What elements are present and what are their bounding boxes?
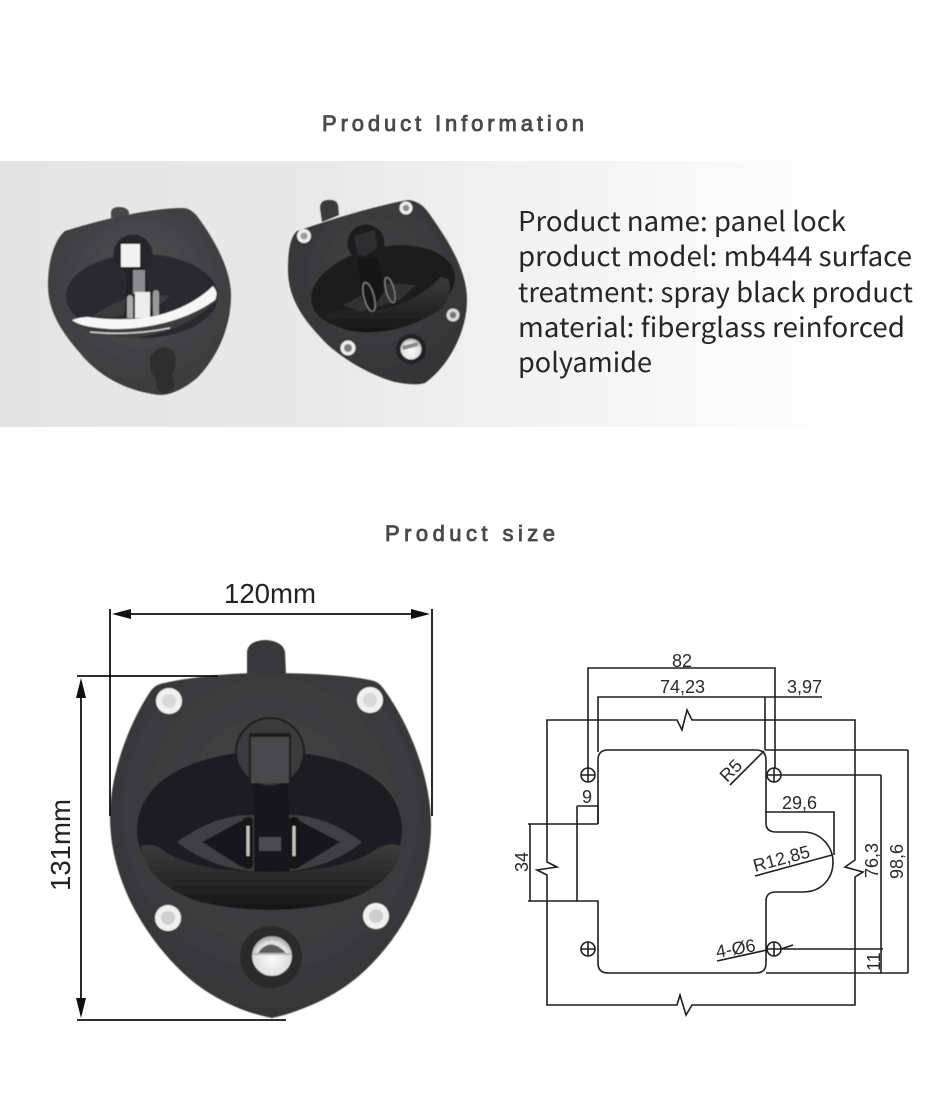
- dimension labels: 76,3: [862, 843, 882, 878]
- dimension lines: [530, 668, 908, 973]
- handle recess: [137, 753, 402, 907]
- product photo: dimensioned lock: [110, 640, 431, 1018]
- key cylinder: [396, 334, 426, 364]
- outer panel with break marks: [537, 710, 863, 1015]
- dimension: height 131mm: 131mm: [45, 799, 76, 891]
- text block: product description: treatment: spray black product: [518, 271, 913, 310]
- dimension labels: 9: [582, 787, 592, 807]
- hinge: [252, 780, 290, 875]
- dimension labels: [512, 651, 907, 971]
- dimension labels: 29,6: [782, 793, 817, 813]
- dimension labels: 4-Ø6: [714, 935, 757, 962]
- mounting holes: [581, 768, 781, 956]
- text block: product description: polyamide: [518, 341, 652, 380]
- R5 leader: [730, 751, 764, 785]
- dimension labels: R5: [716, 755, 746, 786]
- text block: product description: [518, 200, 913, 380]
- screw holes: [155, 687, 389, 931]
- grip handle: [141, 844, 400, 910]
- panel: product information band: [0, 161, 950, 427]
- key cylinder: [240, 926, 302, 988]
- text block: product description: material: fiberglass reinforced: [518, 306, 905, 345]
- dimension labels: 74,23: [660, 677, 705, 697]
- screw holes: [297, 202, 460, 356]
- heading: Product Information: Product Information: [322, 111, 584, 136]
- text block: product description: product model: mb444 surface: [518, 235, 912, 274]
- dimension labels: R12,85: [751, 842, 812, 876]
- 4-O6 leader: [717, 950, 767, 961]
- dimension labels: 3,97: [787, 677, 822, 697]
- heading: Product size: Product size: [385, 521, 555, 546]
- dimension labels: 11: [864, 952, 884, 971]
- R12,85 leader: [755, 855, 832, 876]
- technical drawing: panel cutout: [512, 651, 908, 1015]
- dimension labels: 98,6: [887, 844, 907, 879]
- dimension labels: 82: [672, 651, 692, 671]
- product photo: lock with chrome handle: [48, 207, 231, 395]
- cutout outline: [528, 750, 833, 973]
- text block: product description: Product name: panel lock: [518, 200, 846, 239]
- product photo: black lock: [288, 200, 467, 384]
- dimension: height 131mm: [45, 676, 286, 1020]
- dimension: width 120mm: [110, 578, 432, 816]
- dimension: width 120mm: 120mm: [224, 578, 316, 609]
- dimension labels: 34: [512, 852, 532, 872]
- latch: [235, 717, 305, 787]
